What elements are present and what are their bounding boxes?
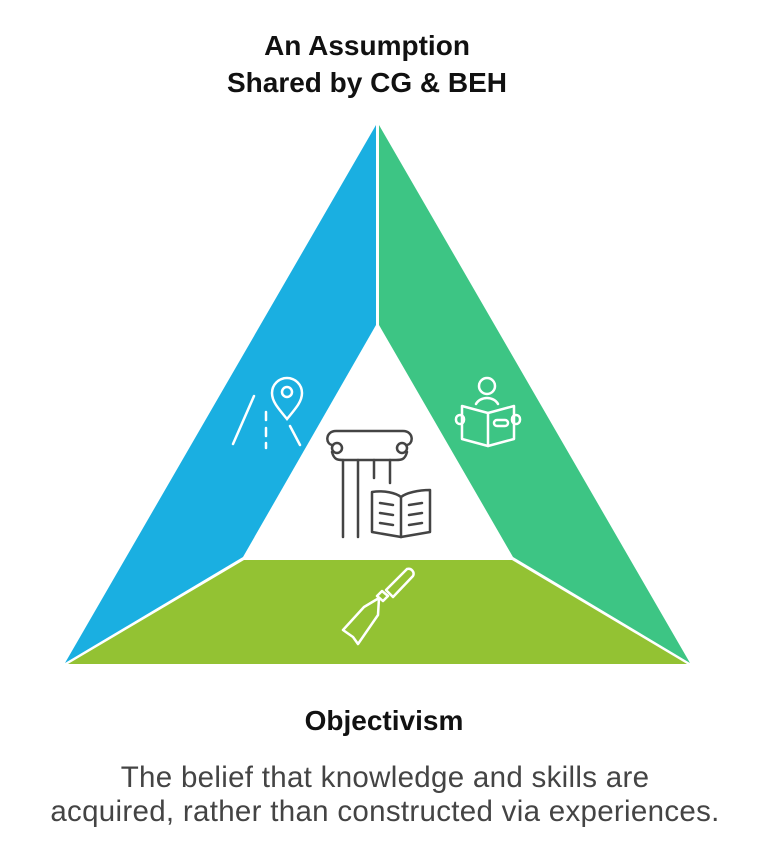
text block: description: acquired, rather than constructed via experiences. bbox=[50, 795, 720, 828]
panel: lime bottom bbox=[68, 560, 687, 664]
icon: column with open book bbox=[327, 431, 430, 537]
text block: description bbox=[50, 761, 720, 828]
title bbox=[227, 30, 507, 98]
icon: road with location pin bbox=[233, 378, 302, 448]
title: Shared by CG & BEH bbox=[227, 67, 507, 98]
heading: Objectivism: Objectivism bbox=[305, 705, 463, 736]
icon: chisel bbox=[343, 569, 414, 644]
panel: green right bbox=[379, 125, 690, 663]
icon: person reading bbox=[456, 378, 520, 446]
panel: blue left bbox=[65, 125, 376, 663]
title: An Assumption bbox=[264, 30, 470, 61]
text block: description: The belief that knowledge and skills are bbox=[121, 761, 649, 794]
